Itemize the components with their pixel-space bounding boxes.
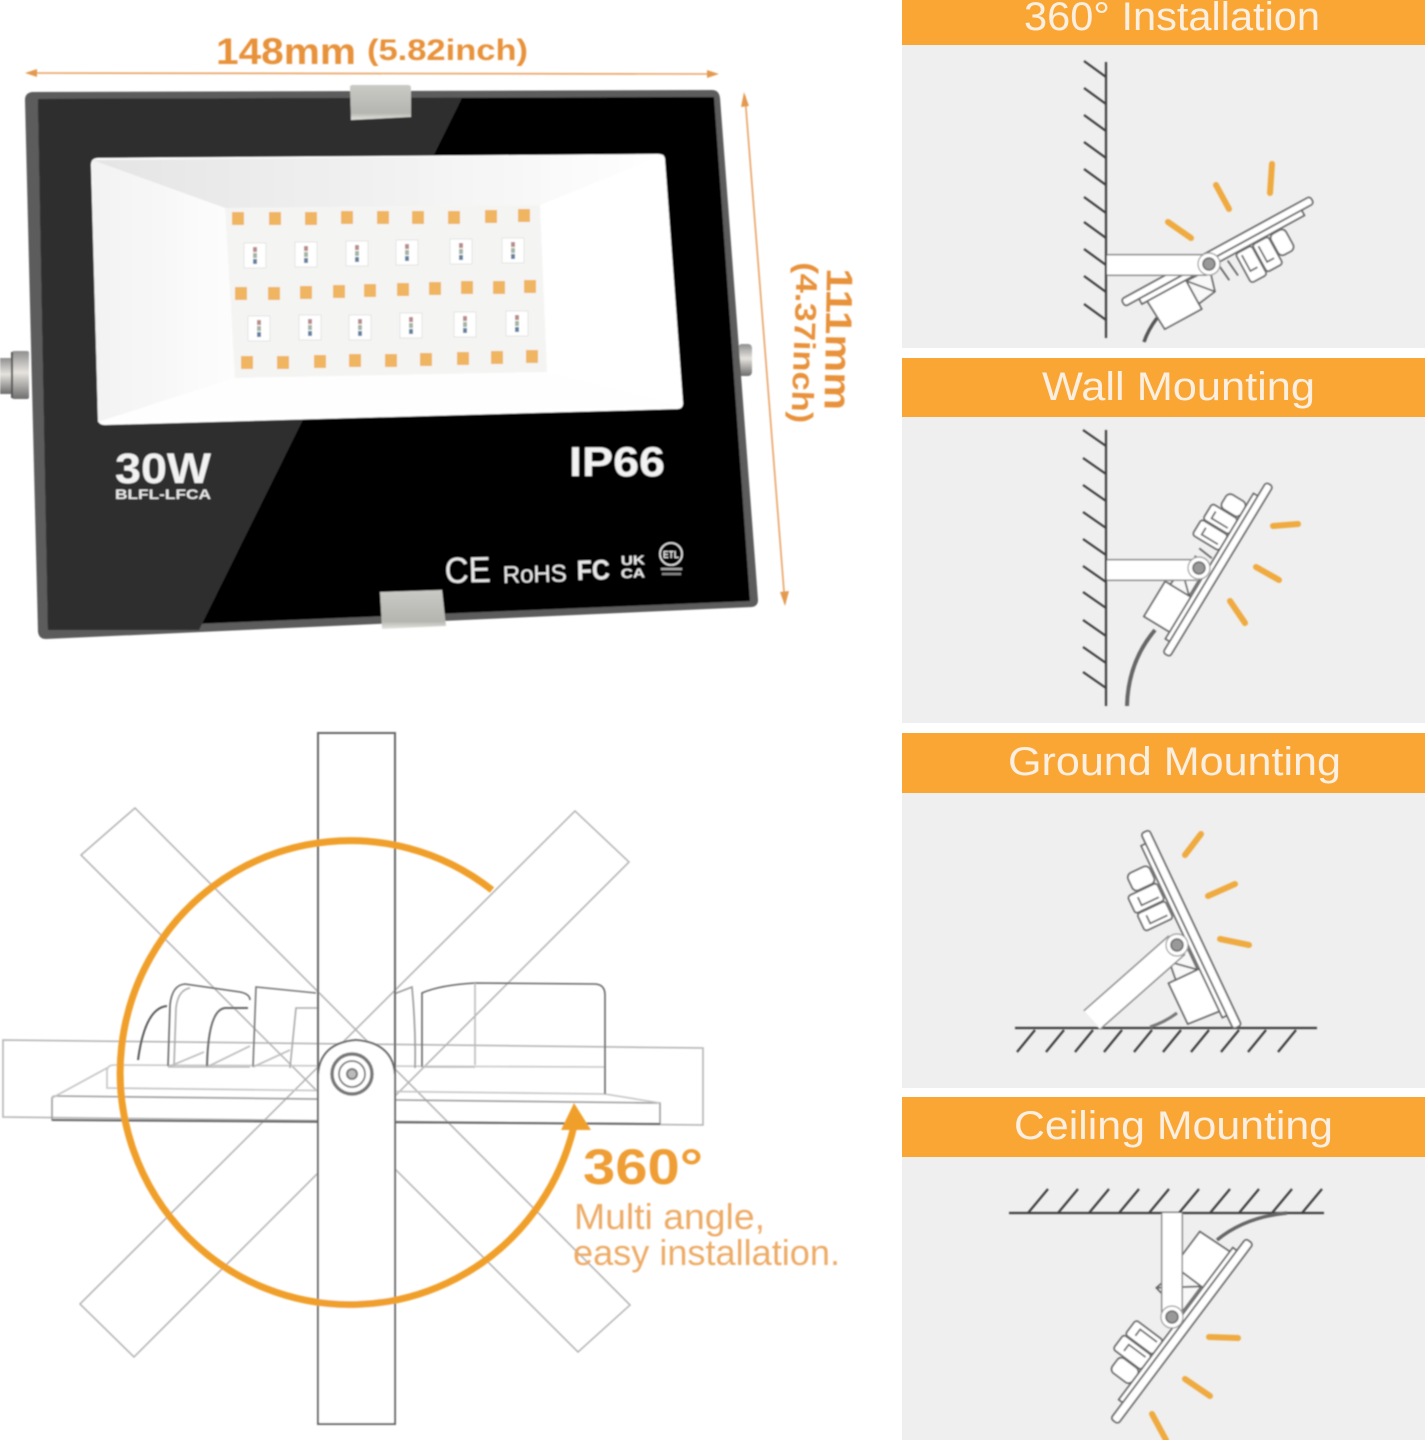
heading: ground mounting: Ground Mounting (1008, 740, 1341, 784)
RGB LEDs (244, 238, 528, 341)
glass reflection (38, 98, 462, 630)
heading: wall mounting: Wall Mounting (1042, 365, 1315, 409)
lamp housing (25, 90, 758, 639)
dimension: height 111mm (741, 92, 860, 606)
panel background (902, 793, 1425, 1088)
icon: pivot bolt (332, 1054, 372, 1094)
certification marks: FC (576, 554, 610, 586)
panel: ground mounting (902, 733, 1425, 1088)
caption: 360 degrees: 360° (583, 1139, 703, 1195)
icon: left cable gland (0, 351, 29, 399)
light window (91, 154, 683, 425)
diagram: ground mount (1015, 830, 1317, 1052)
vertical bracket arm (318, 733, 395, 1424)
dimension: width 148mm: 148mm (216, 31, 356, 72)
amber LEDs (232, 209, 538, 369)
panel: ceiling mounting (902, 1097, 1425, 1440)
LED board (225, 205, 547, 378)
icon: right side screw (738, 344, 752, 376)
bracket pivot end (318, 1040, 395, 1424)
panel background (902, 1157, 1425, 1440)
dimension: height 111mm: 111mm (817, 268, 860, 411)
certification marks: CA (621, 565, 646, 581)
certification marks: ETL (663, 550, 679, 561)
lamp glass (38, 97, 750, 630)
banner (902, 733, 1425, 793)
rotated bracket outlines (3, 808, 703, 1357)
dimension: width 148mm (25, 31, 719, 78)
certification marks (444, 543, 682, 591)
rotation arc arrow (120, 841, 591, 1305)
panel: 360 installation (902, 0, 1425, 348)
flood light front view (0, 85, 758, 639)
panel background (902, 417, 1425, 723)
caption: multi angle easy installation: Multi angle, (574, 1196, 765, 1237)
diagram: wall mount facing out (1083, 430, 1298, 706)
diagram: ceiling mount (1009, 1189, 1324, 1440)
panel background (902, 45, 1425, 348)
caption: multi angle easy installation (573, 1196, 840, 1273)
caption: multi angle easy installation: easy installation. (573, 1232, 840, 1273)
lamp side profile (52, 983, 660, 1124)
dimension: height 111mm: (4.37inch) (784, 262, 823, 424)
360 degree rotation diagram (3, 733, 840, 1424)
top mounting clip (350, 85, 411, 120)
certification marks: CE (444, 549, 491, 591)
diagram: wall mount angled up (1084, 61, 1333, 342)
bottom mounting clip (380, 590, 446, 629)
banner (902, 358, 1425, 417)
heading: ceiling mounting: Ceiling Mounting (1014, 1104, 1333, 1148)
banner (902, 0, 1425, 45)
panel: wall mounting (902, 358, 1425, 723)
label: model number: BLFL-LFCA (115, 486, 211, 502)
certification marks: RoHS (502, 560, 567, 589)
dimension: width 148mm: (5.82inch) (367, 34, 528, 67)
label: 30W: 30W (115, 445, 211, 493)
banner (902, 1097, 1425, 1157)
certification marks: UK (621, 552, 646, 568)
label: IP66: IP66 (569, 438, 665, 485)
